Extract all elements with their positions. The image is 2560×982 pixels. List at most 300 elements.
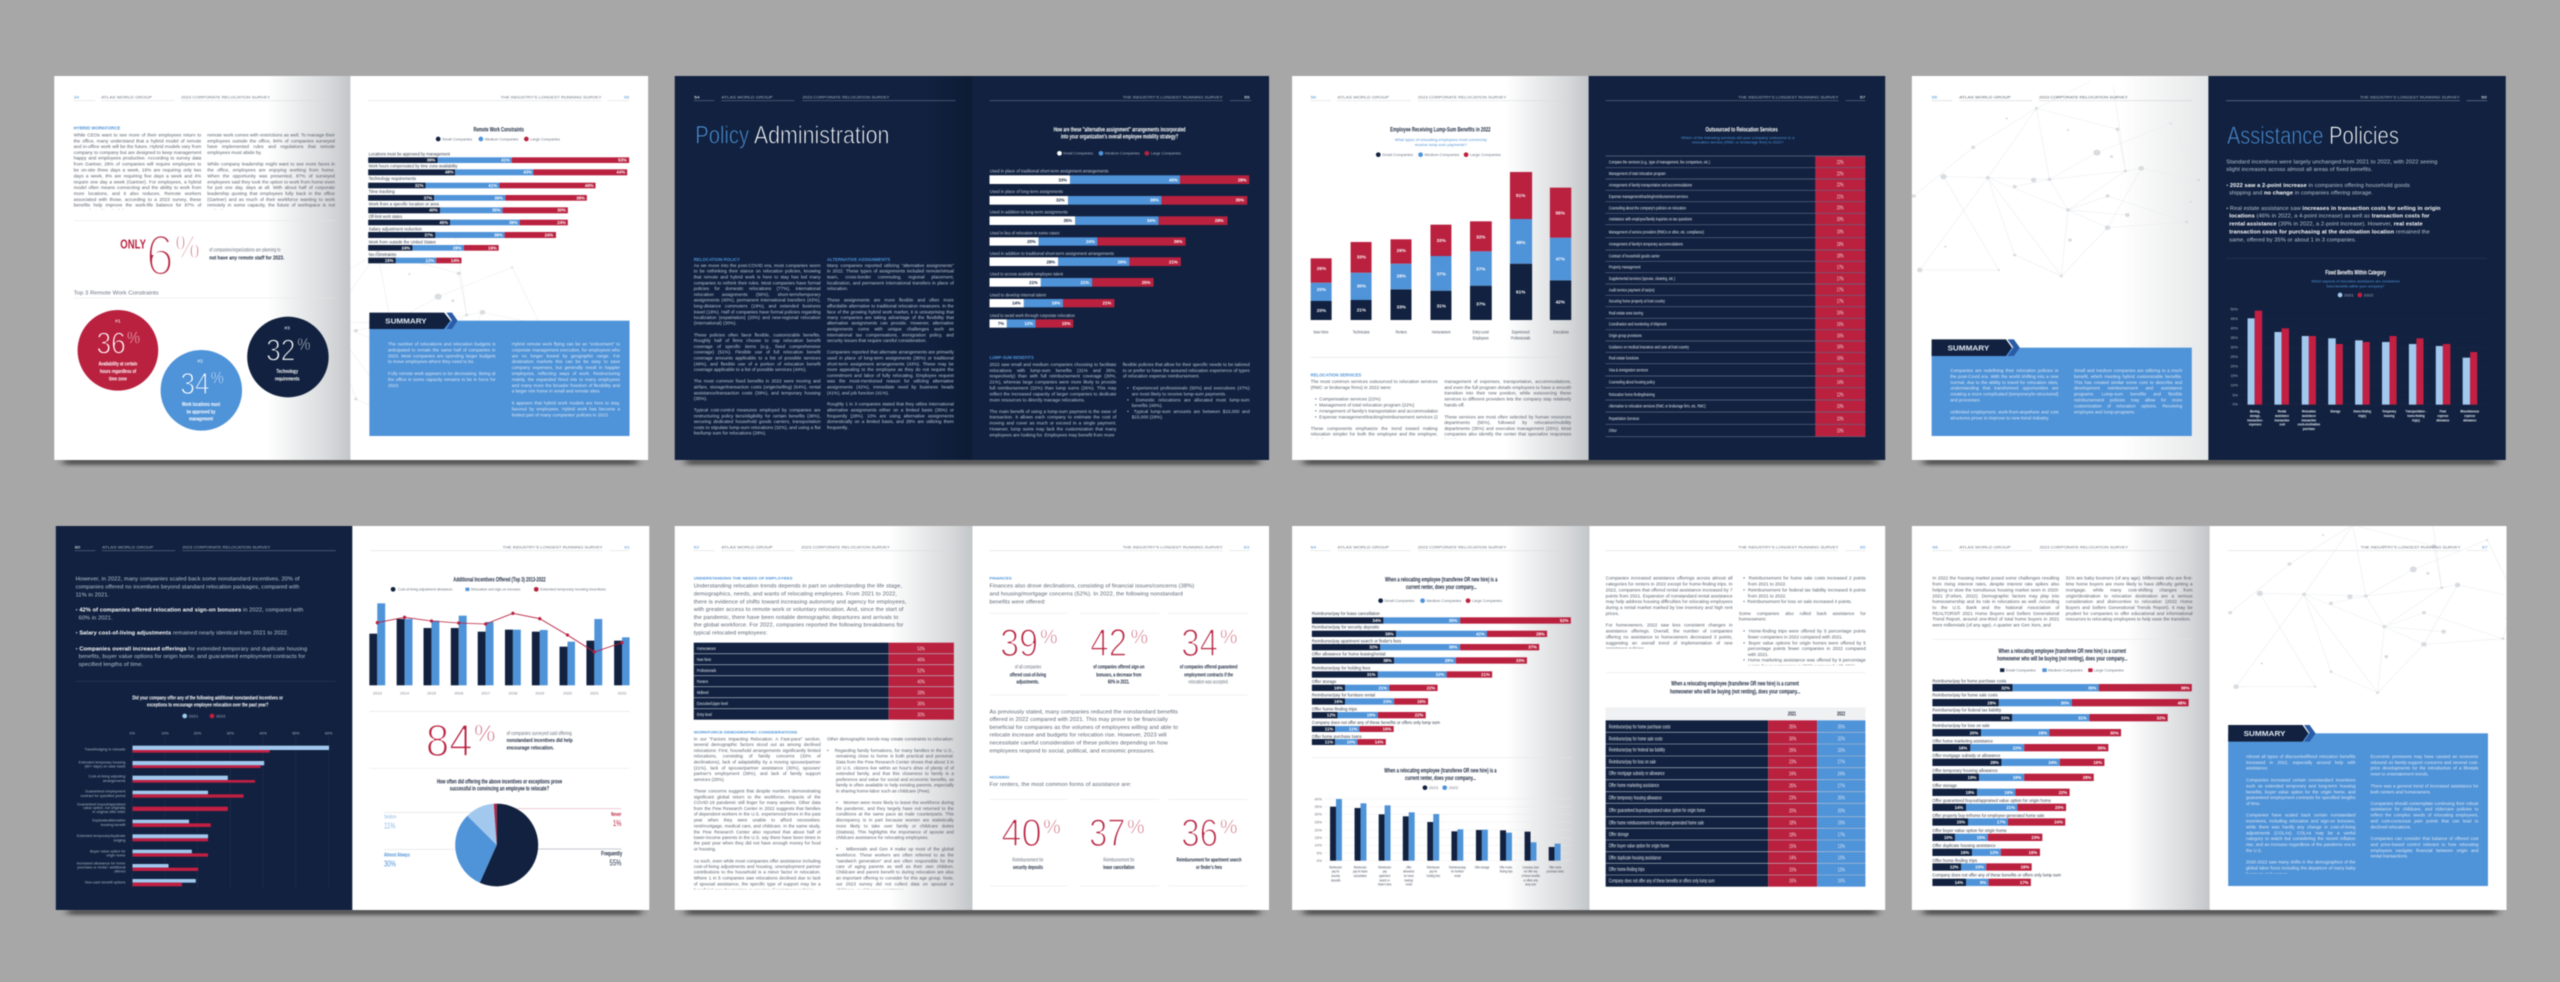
label: never [611, 811, 622, 828]
chart subtitle [2311, 280, 2400, 288]
text block: summary left: Fully remote work appears to be decreasing. Being at the office in some capacity remains to be in force for 2023. [388, 371, 495, 388]
page header right [368, 95, 630, 101]
column chart: renter 2021 vs 2022: 10% [1315, 844, 1323, 848]
table: homeowner assistance: 27% [1838, 783, 1845, 788]
column chart: renter 2021 vs 2022: Offer home [1549, 865, 1562, 869]
stacked bar chart: homeowner: 16% [1959, 745, 1967, 750]
text block: summary right: It appears that hybrid work models are here to stay, favored by employees. Hybrid work has become a limited part of many companies' policies in 2023. [512, 401, 620, 418]
column chart: fixed benefits [2228, 307, 2487, 431]
callout: 84% [426, 716, 573, 766]
column chart: fixed benefits: 35% [2230, 336, 2239, 340]
stacked bar chart: remote work constraints: 32% [415, 183, 424, 188]
stacked column chart: 47% [1556, 257, 1566, 262]
table: outsourced services [1606, 156, 1865, 437]
table: relocated employees: Professionals [697, 667, 716, 673]
stat: 36%: Reimbursement for apartment search [1176, 857, 1242, 863]
page header right: 55 [1244, 95, 1250, 99]
page header left: 2023 CORPORATE RELOCATION SURVEY [801, 545, 890, 549]
table: outsourced services: Visa & immigration services [1609, 367, 1648, 373]
text block: assistance column 2: • Home-finding trips were offered by 5 percentage points fewer companies in 2022 compared with 2021. [1743, 628, 1866, 639]
table: outsourced services: Compare the services (e.g., type of management, fee comparison, etc.) [1609, 159, 1711, 165]
table: outsourced services: Real estate area touring [1609, 310, 1643, 315]
horizontal bar chart: incentives: contract for specified period [80, 794, 125, 798]
table: homeowner assistance: 13% [1838, 843, 1845, 849]
heading: relocation services: RELOCATION SERVICES [1311, 373, 1361, 378]
stacked bar chart: renter: 19% [1367, 713, 1376, 718]
panel: left white page [1292, 76, 1589, 460]
legend: 2021 [2344, 293, 2355, 297]
page header left [1932, 95, 2192, 101]
stacked bar chart: remote work constraints: 38% [576, 195, 585, 200]
table: outsourced services: Contract of household goods carrier [1609, 253, 1660, 258]
table: relocated employees: 30% [917, 712, 925, 717]
stacked bar chart: alternative assignment: Used in place of traditional short-term assignment arrangements [990, 169, 1109, 174]
stacked bar chart: remote work constraints: 37% [424, 232, 433, 237]
stat: 37%: 37 [1089, 811, 1126, 855]
column chart: renter 2021 vs 2022: finding trips [1500, 869, 1513, 874]
page header left [1311, 95, 1571, 101]
panel: right white page [1589, 526, 1885, 910]
column chart: renter 2021 vs 2022: for home [1404, 874, 1414, 878]
column chart: renter 2021 vs 2022: pay for lease [1353, 869, 1368, 874]
stacked bar chart: remote work constraints: 15% [385, 258, 394, 263]
table: homeowner assistance: Offer mortgage subsidy or allowance [1609, 770, 1665, 776]
circle: #1 36%: #1 [115, 318, 121, 324]
stacked bar chart: alternative assignment: Used in place of long-term assignments [990, 189, 1064, 195]
text block: summary left [1950, 368, 2059, 424]
text block: lump-sum benefits column 2 [1123, 362, 1250, 425]
label: frequently: Frequently [601, 851, 622, 858]
title: policy administration: Administration [754, 121, 889, 149]
text block: demographic column 1 [694, 736, 821, 889]
horizontal bar chart: incentives: Non-cash benefit options [85, 880, 126, 884]
stacked bar chart: remote work constraints: 43% [523, 170, 532, 175]
combo chart: additional incentives: 2015 [427, 690, 437, 695]
page header right: 67 [2482, 545, 2488, 549]
table: outsourced services: 16% [1837, 333, 1844, 338]
stacked bar chart: renter: 38% [1385, 631, 1394, 636]
stacked bar chart: homeowner: 17% [2020, 880, 2029, 885]
stat: 40%: security deposits [1013, 864, 1043, 870]
table: homeowner assistance: Offer duplicate housing assistance [1609, 855, 1662, 860]
column chart: fixed benefits: 5% [2233, 393, 2239, 397]
stacked bar chart: remote work constraints: 19% [488, 245, 497, 250]
column chart: fixed benefits: 10% [2230, 384, 2239, 388]
stacked bar chart: homeowner: 32% [2001, 685, 2010, 690]
stacked bar chart: alternative assignment: 15% [1062, 321, 1071, 326]
page header left: 64 [1311, 545, 1317, 549]
stacked bar chart: renter: Offer storage [1312, 679, 1337, 685]
table: homeowner assistance: 14% [1789, 855, 1796, 861]
chart title: outsourced to relocation services: Outsourced to Relocation Services [1706, 127, 1778, 134]
stat: 36%: or finder's fees [1196, 864, 1222, 870]
page header right: THE INDUSTRY'S LONGEST RUNNING SURVEY [1738, 95, 1839, 99]
stacked bar chart: remote work constraints: 35% [492, 208, 501, 213]
panel: summary [2228, 725, 2488, 886]
text block: summary right: There was a general trend of increased assistance for both renters and homeowners. [2371, 783, 2478, 794]
stacked bar chart: alternative assignment: 38% [1150, 198, 1159, 203]
text block: previous statement: As previously stated, many companies reduced the nonstandard benefits offered in 2022 compared with 2021. This may prove to be financially beneficial for companies as the volumes of employees willing and able to relocate increase and budgets for relocation rise. However, 2023 will necessitate careful consideration of these policies depending on how employees respond to social, political, and economic pressures. [989, 708, 1178, 754]
column chart: renter 2021 vs 2022: for furniture [1451, 869, 1464, 874]
combo chart: additional incentives [369, 603, 630, 695]
text block: lump-sum benefits column 1: 2022 saw small and medium companies choosing to facilitate relocations with lump-sum benefits (31% and 35%, respectively) than with full reimbursement coverage (30%, 21%), whereas large companies were more likely to provide full reimbursement (32%) than lump sums (26%). This may reflect the increased capacity of larger companies to dedicate more resources to directly manage relocations. [989, 362, 1116, 402]
circle: #1 36%: time zone [109, 376, 127, 383]
page header left [1311, 545, 1571, 551]
stacked bar chart: alternative assignment: 33% [1058, 177, 1067, 182]
page header left: 58 [1932, 95, 1938, 99]
bullet: salary cost-of-living: • Salary cost-of-living adjustments remained nearly identical from 2021 to 2022. [76, 630, 289, 636]
column chart: fixed benefits: 50% [2230, 307, 2239, 311]
horizontal bar chart: incentives: in original offer letter [92, 810, 126, 814]
table: homeowner assistance: 33% [1838, 747, 1845, 753]
column chart: renter 2021 vs 2022: 15% [1315, 836, 1323, 840]
stacked bar chart: alternative assignment: 35% [1235, 198, 1244, 203]
stacked bar chart: remote work constraints: 40% [429, 208, 438, 213]
bullet: overall offerings: • Companies overall increased offerings for extended temporary and duplicate housing benefits, buyer value options for origin home, and guaranteed employment contracts for specified lengths of time. [76, 645, 307, 667]
stacked bar chart: homeowner: 22% [2059, 790, 2067, 795]
stacked bar chart: alternative assignment: 14% [1012, 301, 1021, 306]
chart title: fixed benefits: Fixed Benefits Within Category [2325, 270, 2386, 277]
table: relocated employees: Executive/Upper level [697, 700, 728, 706]
table: homeowner assistance: 27% [1838, 759, 1845, 765]
circle: #3 32%: requirements [275, 376, 300, 383]
stacked bar chart: homeowner: 30% [2110, 730, 2119, 735]
stacked bar chart: homeowner: Reimburse/pay for home purchase costs [1932, 679, 2007, 684]
chart subtitle: What types of relocating employees most commonly [1395, 137, 1487, 142]
stacked column chart: 33% [1397, 305, 1407, 310]
stacked bar chart: homeowner: 48% [2178, 700, 2186, 705]
stacked bar chart: alternative assignment: Used to access available employee talent [990, 272, 1064, 277]
stacked column chart: 55% [1556, 210, 1566, 215]
chart title: incentives: exceptions to encourage employee relocation over the past year? [147, 702, 268, 709]
table: outsourced services: 17% [1837, 298, 1844, 304]
stacked bar chart: homeowner: Offer storage [1932, 783, 1957, 789]
page header right: 65 [1860, 545, 1866, 549]
spread 2: policy administration [675, 76, 1269, 465]
text block: relocation services column 1: • Management of total relocation program (22%) [1315, 402, 1414, 407]
page header left [74, 95, 336, 101]
stacked bar chart: renter: 38% [1383, 658, 1392, 663]
text block: assistance column 2 [1739, 575, 1866, 665]
stacked bar chart: remote work constraints: 45% [439, 220, 448, 225]
table: homeowner assistance: Offer home-finding trips [1609, 866, 1645, 872]
stacked bar chart: homeowner: 14% [1955, 880, 1963, 885]
stacked bar chart: alternative assignment: 32% [1056, 198, 1065, 203]
stacked bar chart: alternative assignment: 28% [1046, 259, 1055, 264]
text block: relocation services column 1: The most common services outsourced to relocation services (RMC or brokerage firms) in 2022 were: [1311, 379, 1438, 390]
stacked bar chart: homeowner: Offer property buy-in/home for employee-generated home sale [1932, 813, 2045, 819]
table: outsourced services: Relocation home-finding/training [1609, 391, 1655, 397]
text block: assistance column 2: Some companies also rolled back assistance for homeowners: [1739, 611, 1866, 622]
callout: 84%: of companies surveyed said offering [507, 731, 572, 737]
legend: 2021 [189, 714, 199, 718]
stacked bar chart: alternative assignment: 21% [1103, 301, 1111, 306]
table: relocated employees: Homeowners [697, 645, 716, 651]
label: never: Never [611, 811, 622, 817]
panel: right navy page [2208, 76, 2506, 460]
stacked bar chart: remote work constraints: 37% [424, 195, 432, 200]
stat: 34%: 34 [1181, 621, 1218, 665]
page header right: THE INDUSTRY'S LONGEST RUNNING SURVEY [2361, 545, 2461, 549]
text block: summary left: Unlimited employment, work-from-anywhere and cost structures prove to improve to new trend industry. [1950, 410, 2059, 420]
circle: #2 34% [161, 350, 242, 431]
text block: assistance column 2: • Buyer value options for origin homes were offered by 5 percentage points fewer companies in 2022 compared with 2021. [1743, 640, 1866, 657]
stacked bar chart: alternative assignment: Used in addition to traditional short-term assignment arrangements [990, 251, 1115, 257]
page header right [1606, 95, 1866, 101]
text block: relocation policy [694, 263, 821, 439]
stacked bar chart: remote work constraints: Salary adjustment reduction [369, 227, 422, 232]
horizontal bar chart: incentives: 0% [130, 731, 136, 735]
stat: 36% [1176, 811, 1242, 870]
stacked bar chart: renter: 52% [1560, 618, 1569, 623]
spread 4: assistance policies [1912, 76, 2506, 465]
circle: #2 34%: be approved by [187, 409, 216, 416]
stacked column chart: 37% [1476, 267, 1486, 272]
stacked bar chart: remote work constraints: 44% [617, 170, 625, 175]
stacked bar chart: homeowner: Offer mortgage subsidy or allowance [1932, 753, 2001, 759]
page header right [989, 95, 1251, 101]
heading: lump-sum benefits: LUMP-SUM BENEFITS [989, 355, 1034, 361]
table: outsourced services: Arrangement of family's temporary accommodations [1609, 241, 1683, 247]
column chart: renter 2021 vs 2022: cancellation [1354, 874, 1367, 878]
heading: relocation policy: RELOCATION POLICY [694, 257, 741, 263]
chart title: homeowner question: homeowner who will be buying (not renting), does your company... [1997, 656, 2128, 663]
horizontal bar chart: incentives: purchase or rental / additional [77, 866, 126, 870]
stacked bar chart: renter: 31% [1367, 672, 1376, 677]
table: relocated employees: 52% [917, 668, 925, 673]
column chart: renter 2021 vs 2022: purchase loans [1547, 869, 1564, 874]
panel: right navy page [1589, 76, 1885, 460]
text block: assistance column 2: • Reimbursement for loss on sale increased 4 points. [1743, 599, 1852, 604]
stacked bar chart: homeowner: 15% [1977, 835, 1986, 840]
text block: summary left [2246, 754, 2356, 874]
stacked column chart: 61% [1516, 289, 1526, 294]
column chart: renter 2021 vs 2022: leasing/ [1404, 878, 1413, 882]
label: never: 1% [613, 818, 622, 828]
label: almost always: 30% [384, 859, 396, 869]
legend: Large Companies [530, 137, 560, 141]
legend: Large Companies [1151, 151, 1181, 156]
column chart: renter 2021 vs 2022: 30% [1315, 813, 1323, 817]
text block: assistance column 1: Companies increased assistance offerings across almost all categories for renters in 2022 except for home-finding trips. In 2022, companies that offered rental assistance increased by 7 points from 2021. Expansion of nonstandard rental assistance may help address housing difficulties for relocating employees during a rental market marked by low inventory and high rent prices. [1606, 576, 1733, 616]
circle: #1 36%: 36 [97, 327, 126, 361]
stacked bar chart: homeowner: 24% [2054, 820, 2063, 825]
table: outsourced services: Property management [1609, 264, 1641, 270]
legend: Small Companies [1382, 152, 1413, 157]
page header left: ATLAS WORLD GROUP [721, 545, 773, 549]
table: homeowner assistance: 35% [1789, 724, 1796, 730]
horizontal bar chart: incentives [77, 731, 333, 888]
column chart: renter 2021 vs 2022: or offers only [1523, 878, 1538, 882]
table: homeowner assistance: 23% [1789, 795, 1796, 800]
page header left [694, 95, 955, 101]
stacked bar chart: renter: Reimburse/pay for furniture rental [1312, 693, 1375, 698]
stacked bar chart: homeowner: 9% [1980, 880, 1986, 885]
chart title: homeowner question [1670, 681, 1801, 696]
stacked bar chart: remote work constraints: 39% [494, 195, 503, 200]
stacked bar chart: renter: 11% [1325, 740, 1333, 745]
stacked bar chart: homeowner: Offer guaranteed buyout/appraised value option for origin home [1932, 798, 2051, 804]
table: outsourced services: 15% [1837, 367, 1844, 373]
legend: Small Companies [1063, 151, 1093, 156]
stat: 39% [1000, 621, 1057, 685]
chart title: homeowner question: When a relocating employee (transferee OR new hire) is a current [1998, 648, 2126, 655]
text block: demographic column 2: • Women were more likely to leave the workforce during the pandemic, and they largely have not returned to the conditions at the same pace as male counterparts. This discrepancy is in part because women are statistically more likely to take over family or childcare duties (Statista). This highlights the importance of spouse and childcare assistance for relocating employees. [836, 800, 954, 840]
stat: 40%: % [1043, 814, 1061, 838]
column chart: renter 2021 vs 2022: security [1331, 874, 1340, 878]
stat: 39%: % [1040, 624, 1057, 648]
page header right: 61 [624, 545, 631, 549]
stacked bar chart: homeowner: Offer temporary housing allowance [1932, 768, 1998, 774]
stacked bar chart: homeowner: 20% [2055, 805, 2064, 810]
page header left: ATLAS WORLD GROUP [1959, 95, 2011, 99]
stacked bar chart: homeowner: 30% [2061, 700, 2069, 705]
stacked bar chart: remote work constraints: Technology requirements [369, 176, 417, 182]
table: homeowner assistance: 20% [1838, 808, 1845, 813]
page header left: 66 [1932, 545, 1939, 549]
horizontal bar chart: incentives: Extended temporary/duplicate [77, 834, 125, 838]
callout: only 6%: % [175, 230, 200, 265]
page header right: 35 [624, 95, 630, 99]
chart x-axis labels: New Hires [1314, 329, 1328, 334]
column chart: fixed benefits: Storage [2330, 409, 2341, 414]
stacked bar chart: remote work constraints: Locations must be approved by management [369, 152, 451, 157]
stacked bar chart: homeowner: 22% [2013, 745, 2022, 750]
stacked column chart: 32% [1476, 234, 1486, 239]
stacked bar chart: homeowner: 19% [2021, 865, 2029, 870]
stacked bar chart: homeowner: Reimburse/pay for home sale costs [1932, 693, 1998, 698]
column chart: fixed benefits: Temporary [2382, 409, 2396, 414]
horizontal bar chart: incentives: origin home [106, 854, 125, 858]
table: relocated employees: New hires [697, 656, 711, 662]
page header left: 56 [1311, 95, 1317, 99]
table: relocated employees: 53% [917, 646, 925, 651]
text block: summary left: Companies increased certain nonstandard incentives such as extended temporary and long-term housing benefits, buyer value option for the origin home, and guaranteed employment contracts for specified lengths of time. [2246, 777, 2355, 806]
horizontal bar chart: incentives: Guaranteed employment [85, 790, 125, 794]
page header left [75, 545, 336, 551]
stacked bar chart: homeowner: Offer duplicate housing assistance [1932, 843, 1996, 849]
table: homeowner assistance: Company does not offer any of these benefits or offers only lump sum [1609, 878, 1715, 883]
stat: 39%: of all companies [1015, 664, 1042, 670]
stacked bar chart: homeowner: 28% [1987, 700, 1996, 705]
spread 8: homeowner benefits and summary [1912, 498, 2516, 915]
stat: 37%: % [1127, 814, 1144, 838]
stacked bar chart: homeowner: 23% [2031, 835, 2040, 840]
stacked bar chart: alternative assignment: 21% [1029, 280, 1038, 285]
stacked bar chart: renter: Offer home purchase loans [1312, 734, 1362, 740]
column chart: fixed benefits: 15% [2230, 374, 2239, 378]
column chart: renter 2021 vs 2022: search or [1379, 878, 1390, 882]
column chart: fixed benefits: storage, [2250, 414, 2260, 418]
stat: 42%: of companies offered sign-on [1093, 664, 1145, 670]
stacked column chart: 26% [1397, 248, 1407, 253]
stacked bar chart: homeowner: 38% [2181, 685, 2190, 690]
table: homeowner assistance: 19% [1838, 820, 1845, 825]
circle: #2 34%: Work locations must [182, 401, 220, 408]
legend: Small Companies [2006, 668, 2036, 672]
legend: Medium Companies [2048, 668, 2083, 672]
column chart: fixed benefits: allowance [2436, 418, 2450, 422]
column chart: fixed benefits: housing [2384, 414, 2394, 418]
panel: summary: SUMMARY [385, 317, 427, 325]
table: homeowner assistance: Reimburse/pay for federal tax liability [1609, 747, 1666, 753]
stat: 42%: 60% in 2021. [1108, 679, 1130, 685]
stacked bar chart: homeowner: 19% [2093, 760, 2102, 765]
column chart: renter 2021 vs 2022: Reimburse/ [1329, 865, 1342, 869]
stacked bar chart: homeowner: Reimburse/pay for loss on sale [1932, 723, 1990, 729]
panel: left white page [1912, 526, 2210, 910]
column chart: fixed benefits: Relocation [2302, 409, 2316, 414]
horizontal bar chart: incentives: Buyer value option for [90, 849, 126, 853]
stacked bar chart: remote work constraints [368, 152, 629, 263]
text block: alternative assignments: These assignments are more flexible and often more affordable alternative to traditional relocation measures. In the face of the growing hybrid work market, it is unsurprising that many companies are taking advantage of the flexibility that alternative assignments can provide. However, alternative assignments come with unique challenges such as international tax compensations, immigration policy, and security issues that require careful consideration. [827, 298, 954, 343]
page header left: ATLAS WORLD GROUP [101, 95, 152, 99]
page header right: THE INDUSTRY'S LONGEST RUNNING SURVEY [2360, 95, 2460, 99]
text block: demographic column 1: These concerns suggest that despite numbers demonstrating significant global return to the workforce, impacts of the COVID-19 pandemic still linger for many workers. Other data from the Pew Research Center in 2022 suggests that families of dependent workers in the U.S. experienced times in the past year when they were unable to afford necessities: rent/mortgage, medical care, and childcare. In the same study, the Pew Research Center also reported that about half of lower-income parents in the U.S. say there have been times in the past year when they did not have enough money for food or housing. [694, 789, 821, 852]
stacked bar chart: homeowner: Offer buyer value option for origin home [1932, 828, 2007, 834]
stat: 37% [1089, 811, 1144, 870]
stacked bar chart: renter: Reimburse/pay for lease cancellation [1312, 611, 1380, 617]
stat: 40%: 40 [1001, 811, 1042, 855]
table: homeowner assistance: 15% [1789, 867, 1796, 872]
callout: 84%: 84 [426, 716, 473, 766]
column chart: renter 2021 vs 2022 [1315, 797, 1571, 887]
column chart: renter 2021 vs 2022: deposits [1331, 878, 1341, 882]
title: assistance policies: Assistance [2227, 121, 2323, 149]
page header right: 63 [1244, 545, 1250, 549]
stacked bar chart: renter: 33% [1516, 658, 1525, 663]
table: outsourced services: Counseling about housing policy [1609, 379, 1655, 385]
stacked bar chart: homeowner: 17% [1997, 820, 2006, 825]
page header right: THE INDUSTRY'S LONGEST RUNNING SURVEY [1738, 545, 1839, 549]
table: outsourced services: Audit service payment of tax(es) [1609, 287, 1655, 292]
table: outsourced services: 10% [1837, 428, 1844, 433]
stacked bar chart: remote work constraints: Time tracking [369, 189, 395, 195]
stacked bar chart: remote work constraints: 38% [494, 232, 503, 237]
table: homeowner assistance: 24% [1789, 771, 1796, 776]
circle: #3 32%: Technology [276, 368, 298, 375]
stacked bar chart: homeowner: 35% [2088, 685, 2097, 690]
table: homeowner assistance: Reimburse/pay for home purchase costs [1609, 724, 1670, 729]
stacked bar chart: remote work constraints: Off-limit work states [369, 214, 403, 220]
table: outsourced services: 22% [1837, 171, 1844, 176]
page header left: 2023 CORPORATE RELOCATION SURVEY [1418, 95, 1506, 99]
circle: #1 36%: % [127, 329, 140, 348]
stacked column chart: 30% [1357, 284, 1367, 289]
column chart: fixed benefits: expense [2437, 414, 2448, 418]
stat: 42%: 42 [1090, 621, 1127, 665]
table: outsourced services: 17% [1837, 276, 1844, 281]
stacked bar chart: renter: 32% [1436, 672, 1444, 677]
panel: right white page [352, 526, 649, 910]
table: homeowner assistance: 2022 [1837, 711, 1845, 717]
chart title: employee receiving lump-sum benefits: Employee Receiving Lump-Sum Benefits in 2022 [1390, 127, 1491, 134]
column chart: fixed benefits: expense [2464, 414, 2475, 418]
column chart: fixed benefits: 25% [2230, 355, 2239, 359]
stacked bar chart: remote work constraints: No constraints [369, 252, 397, 258]
stat: 36%: 36 [1181, 811, 1218, 855]
column chart: fixed benefits: Home-finding [2353, 409, 2371, 414]
callout: 84%: % [474, 720, 496, 747]
table: outsourced services: 19% [1837, 229, 1844, 235]
combo chart: additional incentives: 2014 [400, 690, 410, 695]
chart title: remote work constraints: Remote Work Constraints [474, 127, 524, 134]
table: outsourced services: Management of total relocation program [1609, 170, 1666, 176]
stacked bar chart: renter [1312, 611, 1571, 745]
table: homeowner assistance: 26% [1838, 795, 1845, 800]
stacked bar chart: alternative assignment: 20% [1027, 239, 1036, 244]
combo chart: additional incentives: 2016 [454, 690, 464, 695]
